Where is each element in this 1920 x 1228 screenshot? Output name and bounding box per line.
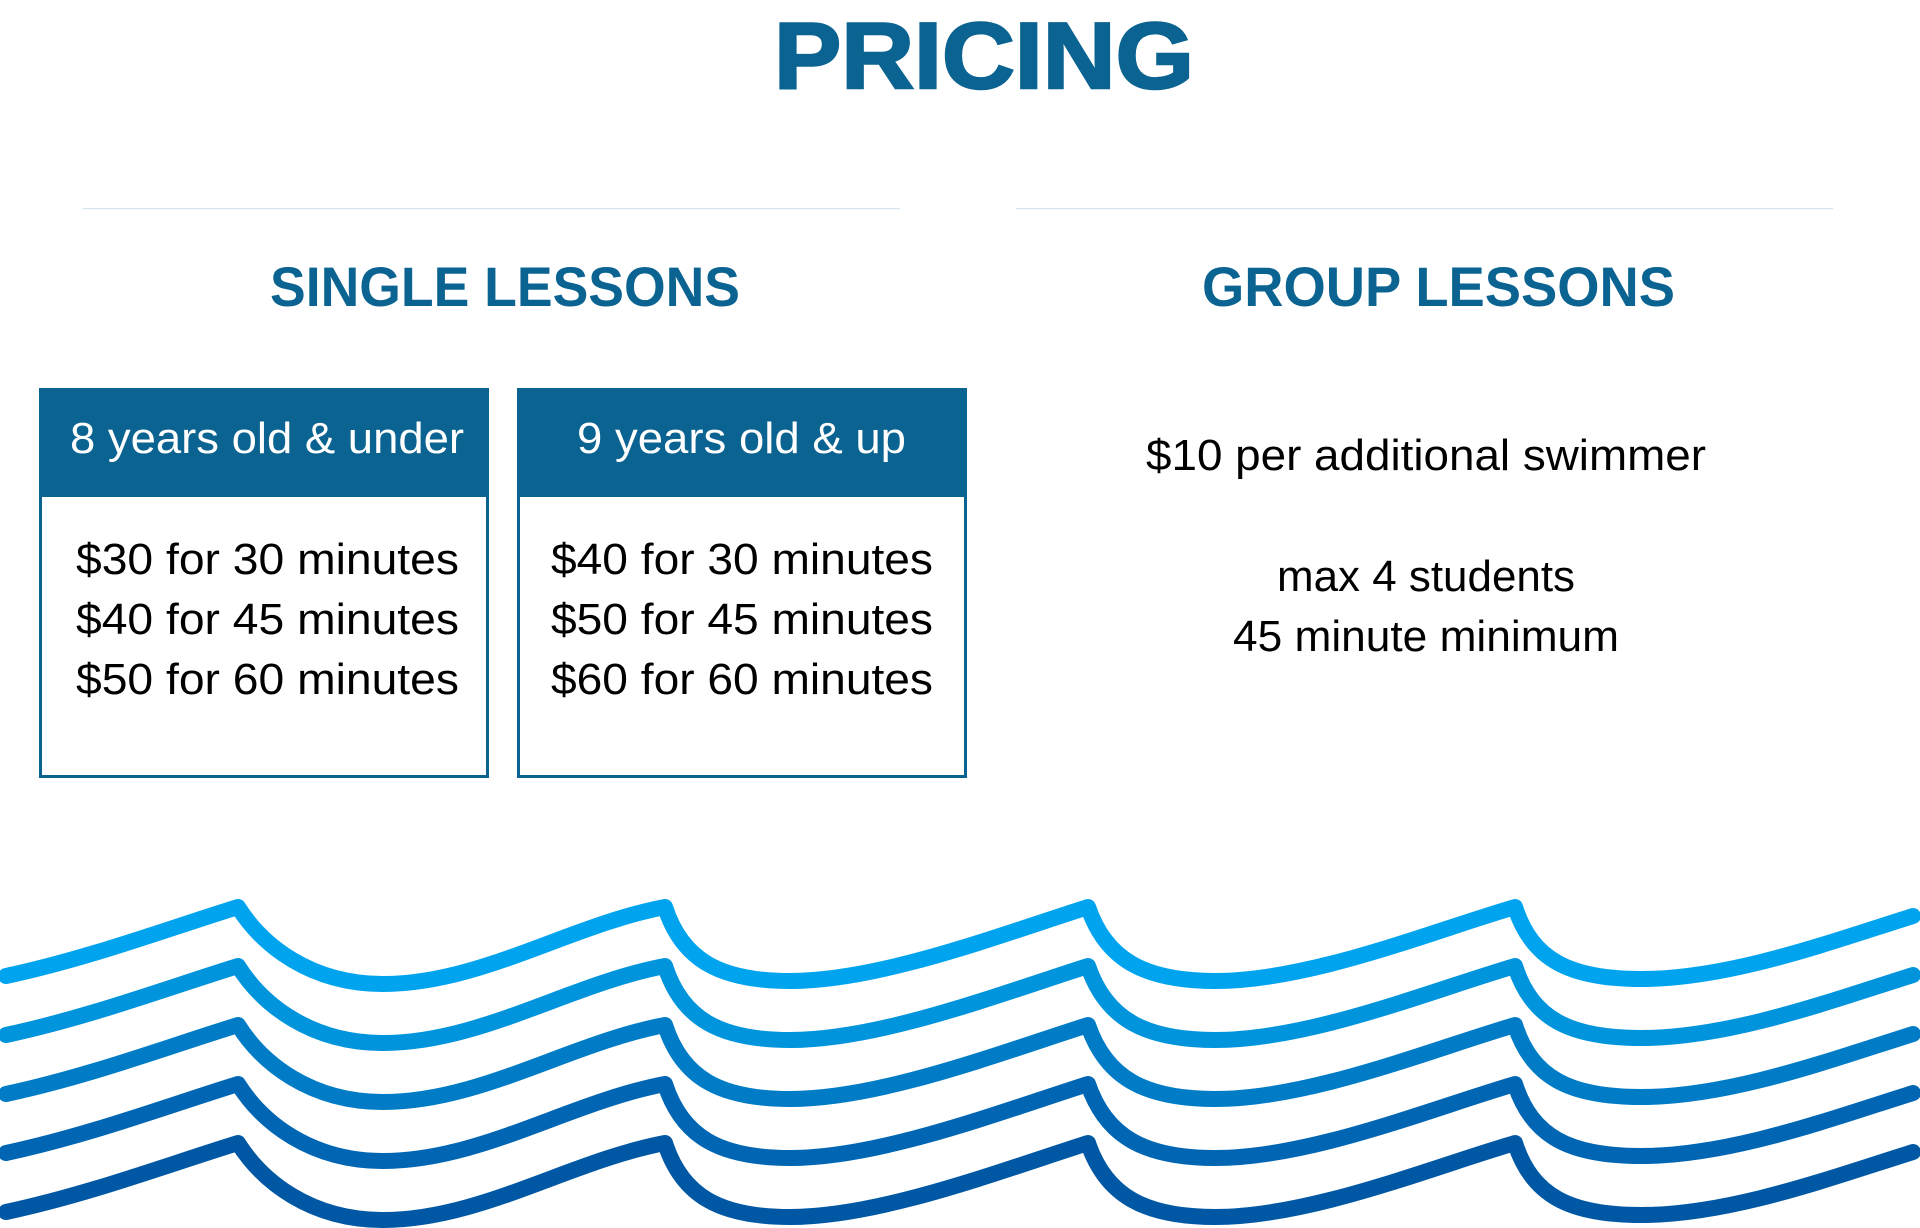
price list: $40 for 45 minutes <box>76 595 459 644</box>
price list: $50 for 60 minutes <box>76 655 459 704</box>
group pricing details: 45 minute minimum <box>1233 612 1619 661</box>
decorative waves <box>6 907 1913 1220</box>
price list: $30 for 30 minutes <box>76 535 459 584</box>
group pricing details <box>1146 431 1706 661</box>
heading: group lessons: GROUP LESSONS <box>1202 255 1675 318</box>
price list: $60 for 60 minutes <box>551 655 933 704</box>
price list: $50 for 45 minutes <box>551 595 933 644</box>
price list <box>76 535 459 704</box>
heading: single lessons: SINGLE LESSONS <box>270 255 740 318</box>
panel: group lessons <box>1146 255 1706 661</box>
card: 9 years old and up <box>517 388 967 776</box>
group pricing details: max 4 students <box>1277 552 1575 601</box>
title: PRICING <box>774 3 1194 108</box>
price list: $40 for 30 minutes <box>551 535 933 584</box>
card heading: 8 years old & under <box>70 414 464 463</box>
price list <box>551 535 933 704</box>
group pricing details: $10 per additional swimmer <box>1146 431 1706 480</box>
card: 8 years old and under <box>39 388 489 776</box>
card heading: 9 years old & up <box>577 414 906 463</box>
panel: single lessons <box>39 255 967 776</box>
